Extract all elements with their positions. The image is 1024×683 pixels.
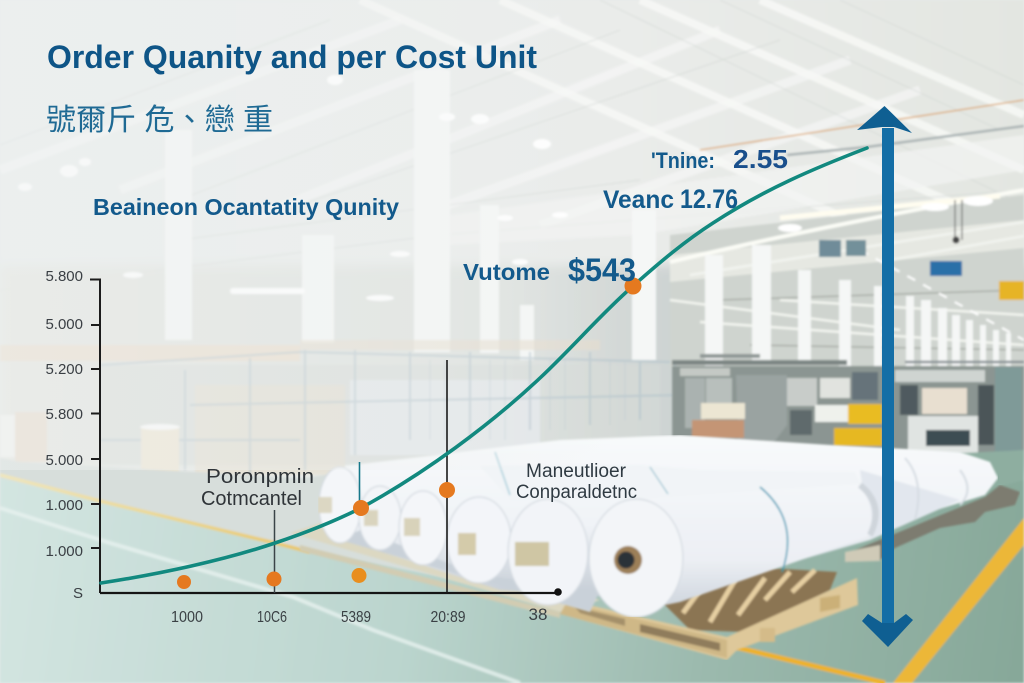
y axis and ticks — [90, 280, 100, 593]
chart annotation: left — [201, 465, 314, 510]
x axis — [100, 592, 558, 594]
chart annotation: left: Poronpmin — [206, 465, 314, 488]
callout: trend value: 2.55 — [733, 144, 788, 174]
x axis end dot — [554, 588, 562, 596]
teal leader line — [358, 462, 360, 505]
paper rolls — [318, 435, 998, 617]
callout: variance value: Veanc — [603, 186, 674, 214]
washed-out photo overlay on the left — [0, 0, 620, 470]
chart annotation: right: Conparaldetnc — [516, 482, 637, 503]
chart annotation: right: Maneutlioer — [526, 461, 627, 482]
y axis labels — [45, 268, 83, 602]
y axis labels: 5.800 — [45, 268, 83, 285]
x axis labels: 38 — [529, 605, 547, 624]
callout: volume value: $543 — [568, 252, 636, 288]
y axis labels: 1.000 — [45, 543, 83, 560]
data points — [177, 278, 642, 589]
pallets — [290, 485, 1020, 660]
chart heading: Beaineon Ocantatity Qunity — [93, 194, 399, 220]
x axis labels: 1000 — [171, 609, 203, 626]
callout: variance value — [603, 184, 738, 214]
callout: variance value: 12.76 — [680, 184, 738, 214]
black leader line — [446, 360, 448, 593]
double-headed vertical arrow — [857, 106, 913, 647]
drop lines — [274, 510, 276, 593]
title: Order Quanity and per Cost Unit — [47, 39, 537, 75]
y axis labels: 5.200 — [45, 361, 83, 378]
chart annotation: right — [516, 461, 637, 503]
y axis labels: 5.000 — [45, 316, 83, 333]
x axis labels: 10C6 — [257, 609, 287, 626]
x axis labels — [171, 605, 547, 626]
callout: trend value — [651, 144, 788, 174]
y axis labels: S — [73, 585, 83, 602]
subtitle in CJK: 號爾斤 危、戀 重 — [46, 104, 273, 137]
y axis labels: 5.800 — [45, 406, 83, 423]
x axis labels: 5389 — [341, 609, 371, 626]
growth curve — [101, 148, 867, 583]
line chart — [45, 148, 867, 626]
callout: trend value: 'Tnine: — [651, 148, 715, 173]
y axis labels: 1.000 — [45, 497, 83, 514]
x axis labels: 20:89 — [430, 609, 466, 626]
callout: volume value: Vutome — [463, 259, 550, 285]
callout: volume value — [463, 252, 636, 288]
y axis labels: 5.000 — [45, 452, 83, 469]
machinery — [672, 354, 1024, 466]
chart annotation: left: Cotmcantel — [201, 487, 302, 510]
